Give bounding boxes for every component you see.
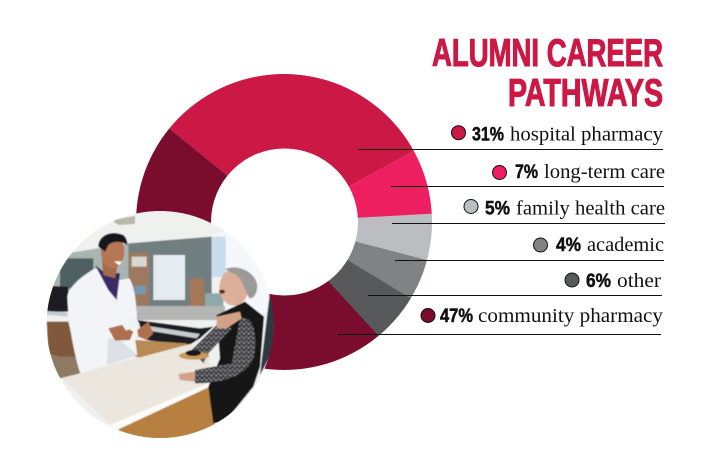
pale blue window pane <box>212 237 226 277</box>
left floor <box>47 343 80 378</box>
photo background: left interior <box>47 243 128 313</box>
donut chart <box>136 74 432 370</box>
left wood cabinet <box>47 322 77 357</box>
customer vest <box>208 302 264 423</box>
left metal desk <box>47 311 67 317</box>
legend: 31% hospital pharmacy: 31% <box>472 124 504 146</box>
legend: 47% community pharmacy: community pharmacy <box>478 305 664 327</box>
pharmacist coat <box>67 268 137 373</box>
segment: other 6% <box>328 260 411 336</box>
hands <box>108 322 153 341</box>
wooden cabinet <box>135 340 187 358</box>
legend: 47% community pharmacy: 47% <box>440 305 473 327</box>
hair <box>98 233 127 252</box>
medicine box <box>122 317 140 331</box>
tray <box>179 352 209 360</box>
customer hair <box>225 267 257 298</box>
segment: community pharmacy 47% <box>136 128 378 370</box>
second person's dark coat <box>260 292 275 375</box>
dark counter band <box>137 320 213 347</box>
legend: 5% family health care: 5% <box>485 198 510 220</box>
title: PATHWAYS <box>508 72 663 115</box>
window <box>153 255 185 300</box>
customer head <box>219 269 249 306</box>
bright right window <box>212 230 273 313</box>
wooden panel <box>190 278 204 310</box>
photo background: back shelves <box>128 237 212 310</box>
legend: 7% long-term care: long-term care <box>544 161 665 183</box>
purple shirt <box>95 265 120 300</box>
segment: family health care 5% <box>355 214 432 260</box>
legend: 6% other: other <box>617 270 661 292</box>
segment: academic 4% <box>347 242 427 298</box>
hand on shoulder <box>217 312 242 328</box>
cardigan sleeve <box>195 318 255 383</box>
counter top <box>62 344 210 425</box>
dark wallet <box>186 350 201 356</box>
cardigan arm raised <box>192 323 232 363</box>
legend: 6% other: 6% <box>586 270 611 292</box>
segment: hospital pharmacy 31% <box>169 74 414 186</box>
shelf items lower <box>134 286 146 294</box>
counter back <box>137 306 225 320</box>
left dark desk <box>47 286 68 312</box>
hand on counter <box>178 372 195 382</box>
left dark window <box>60 258 93 288</box>
face <box>100 241 125 268</box>
legend: 6% other <box>565 270 661 292</box>
legend: 31% hospital pharmacy: hospital pharmacy <box>510 124 664 146</box>
neck <box>102 258 118 279</box>
ceiling light fixture <box>112 216 135 225</box>
counter front edge <box>110 383 210 430</box>
wooden shelving <box>129 252 149 306</box>
legend: 4% academic: 4% <box>556 234 581 256</box>
segment: long-term care 7% <box>348 150 432 218</box>
photo: pharmacist and customer at counter <box>46 211 274 438</box>
white counter strip <box>148 326 200 338</box>
customer open mouth <box>219 290 225 294</box>
smile <box>114 261 122 265</box>
coat shadow <box>107 338 137 365</box>
legend: 5% family health care: family health care <box>516 198 665 220</box>
display items <box>205 293 223 308</box>
counter wood front <box>118 387 217 440</box>
title <box>432 32 663 115</box>
legend: 7% long-term care: 7% <box>515 161 538 183</box>
photo background: ceiling <box>46 211 274 430</box>
shelf items <box>132 257 147 267</box>
leader lines <box>338 150 665 334</box>
legend: 7% long-term care <box>492 161 665 183</box>
legend: 4% academic: academic <box>587 234 664 256</box>
legend: 4% academic <box>534 234 664 256</box>
